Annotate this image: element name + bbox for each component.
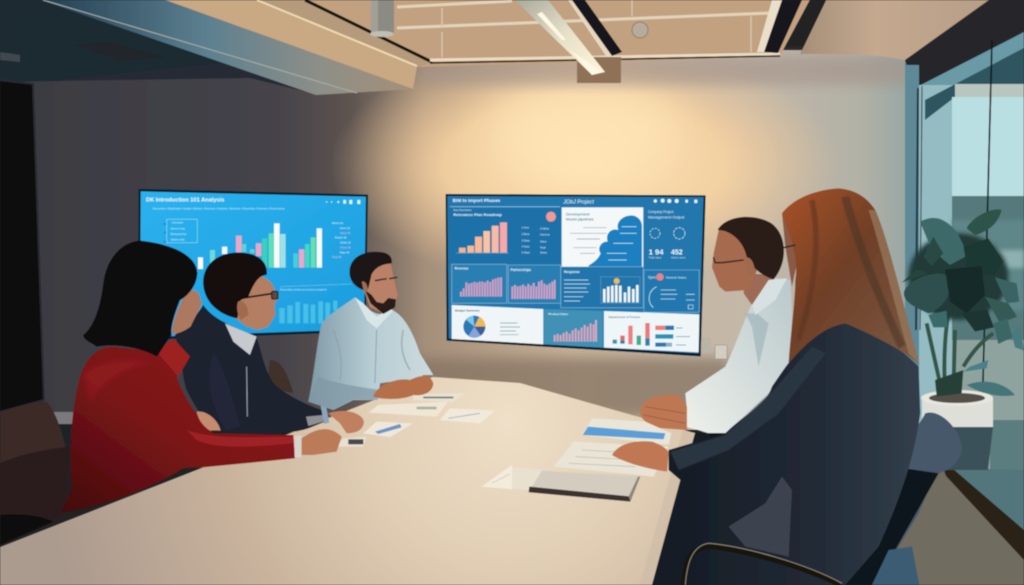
right legend <box>332 221 351 259</box>
back wall <box>0 40 925 430</box>
right legend: Clicks 12 <box>340 240 351 244</box>
panel: teal bars: Product Sales <box>548 312 569 316</box>
right legend: Metric list <box>332 221 343 225</box>
chair arm <box>684 546 840 585</box>
chart legend box: Overview <box>172 220 183 224</box>
window <box>905 0 1024 540</box>
chart legend box <box>163 219 197 244</box>
chart legend box: Values total <box>171 238 185 242</box>
carpet floor <box>860 460 1024 585</box>
chart legend box: Items in use <box>171 226 186 230</box>
table <box>0 377 695 585</box>
chart legend box: 10 <box>163 240 167 244</box>
panel: bars top left: 4 Note <box>522 245 530 249</box>
person: right man <box>640 217 792 450</box>
trouser fold <box>729 477 792 557</box>
jacket <box>652 323 920 585</box>
plant <box>902 209 1024 397</box>
chair behind right woman <box>845 412 962 585</box>
left chair <box>0 402 68 545</box>
right legend: Value 40 <box>340 231 351 235</box>
panel: bars top left: Share <box>540 251 548 255</box>
panel: bars top left: 5 Mark <box>522 250 530 254</box>
panel: mixed bars: Departments of Finance <box>608 315 641 319</box>
panel: teal bars <box>544 309 603 348</box>
screen header <box>450 198 697 207</box>
panel: mauve bars two <box>508 265 561 303</box>
person: right woman <box>612 188 920 585</box>
screen left: DK Introduction 101 Analysis <box>146 198 224 204</box>
right legend: Total 90 <box>332 255 342 259</box>
panel: KPI icons <box>648 210 686 259</box>
panel: bars top left: 3 Data <box>522 239 530 243</box>
panel: pie chart: Budget Summary <box>455 308 480 312</box>
screen left: Secondary results per period compared <box>280 288 327 292</box>
panel: bars top left: 1 Item <box>522 226 530 230</box>
right legend: Rate 44 <box>340 250 350 254</box>
panel: bars top left: 2 Alpha <box>540 226 549 230</box>
panel: pie chart <box>452 305 543 344</box>
panel: white bars: Response <box>564 270 580 274</box>
panel: white cloud: Development <box>566 212 590 217</box>
panel: gauge: Sync <box>648 275 656 279</box>
panel: KPI icons: Total value <box>649 255 662 259</box>
panel: bars top left: Gamma <box>540 233 550 237</box>
woman hair and face <box>83 241 202 357</box>
screen header: BIM to Import Phases <box>453 198 501 203</box>
lower bar chart <box>279 301 337 323</box>
right legend: Reach 18 <box>335 236 347 240</box>
panel: gauge: Network Status <box>666 276 687 280</box>
papers on table right <box>512 418 671 502</box>
chart legend box: Reviewed list <box>171 232 187 236</box>
man in dark jacket <box>175 253 325 434</box>
screen left: Discussion • Dashboard • Insight • Metrics • Revenue • Analysis • Business • Reporting • Forecast • Performance <box>153 206 285 210</box>
panel: mauve bars one: Revenue <box>455 267 469 271</box>
panel: KPI icons: 452 <box>671 249 683 256</box>
panel: white bars <box>561 267 643 308</box>
panel: KPI icons: Active users <box>671 255 686 259</box>
right ceiling <box>800 0 989 60</box>
hair and face <box>781 188 919 364</box>
recessed ceiling <box>257 0 810 67</box>
panel: mixed bars <box>604 311 699 352</box>
panel: bars top left: Value <box>540 239 547 243</box>
floor and skirting left <box>53 412 75 484</box>
sleeve highlight <box>670 347 825 470</box>
panel: mauve bars one <box>452 264 507 303</box>
plant pot <box>921 390 993 470</box>
hand <box>612 441 669 472</box>
panel: bars top left: Relevance Plan Roadmap <box>453 212 502 217</box>
left doorway <box>0 80 44 412</box>
screen left <box>138 189 368 340</box>
panel: white cloud: Model pipelines <box>566 216 594 221</box>
panel: bars top left: Total <box>540 245 546 249</box>
panel: KPI icons: Company Project <box>648 210 674 214</box>
papers on table left <box>337 393 512 489</box>
panel: KPI icons: 1 94 <box>649 247 664 256</box>
woman jacket <box>60 338 295 513</box>
ceiling cylinder <box>370 0 394 37</box>
screen header: JObJ Project <box>562 199 594 205</box>
panel: bars top left <box>449 208 561 264</box>
bar chart <box>198 223 322 269</box>
wall socket plates <box>702 338 727 359</box>
right legend: Items 21 <box>340 226 351 230</box>
chart legend box: 40 <box>163 222 167 226</box>
right legend: Share 30 <box>340 246 351 250</box>
far chair <box>267 360 293 393</box>
panel: bars top left: 2 Beta <box>522 232 530 236</box>
woman hand and cuff <box>197 401 364 457</box>
dark space under table right <box>640 432 770 585</box>
person: centre man <box>308 252 433 410</box>
panel: bars top left: Key Numbers <box>453 208 472 212</box>
ceiling light fixture <box>515 0 621 83</box>
person: woman in red <box>60 241 364 513</box>
panel: mauve bars two: Partnerships <box>511 268 531 272</box>
left ceiling <box>0 0 417 95</box>
panel: KPI icons: Management Output <box>648 215 685 220</box>
screen right <box>446 194 706 356</box>
tablet <box>529 471 640 502</box>
panel: gauge <box>644 270 699 312</box>
panel: white cloud <box>562 207 643 268</box>
chart legend box: 20 <box>163 230 167 234</box>
